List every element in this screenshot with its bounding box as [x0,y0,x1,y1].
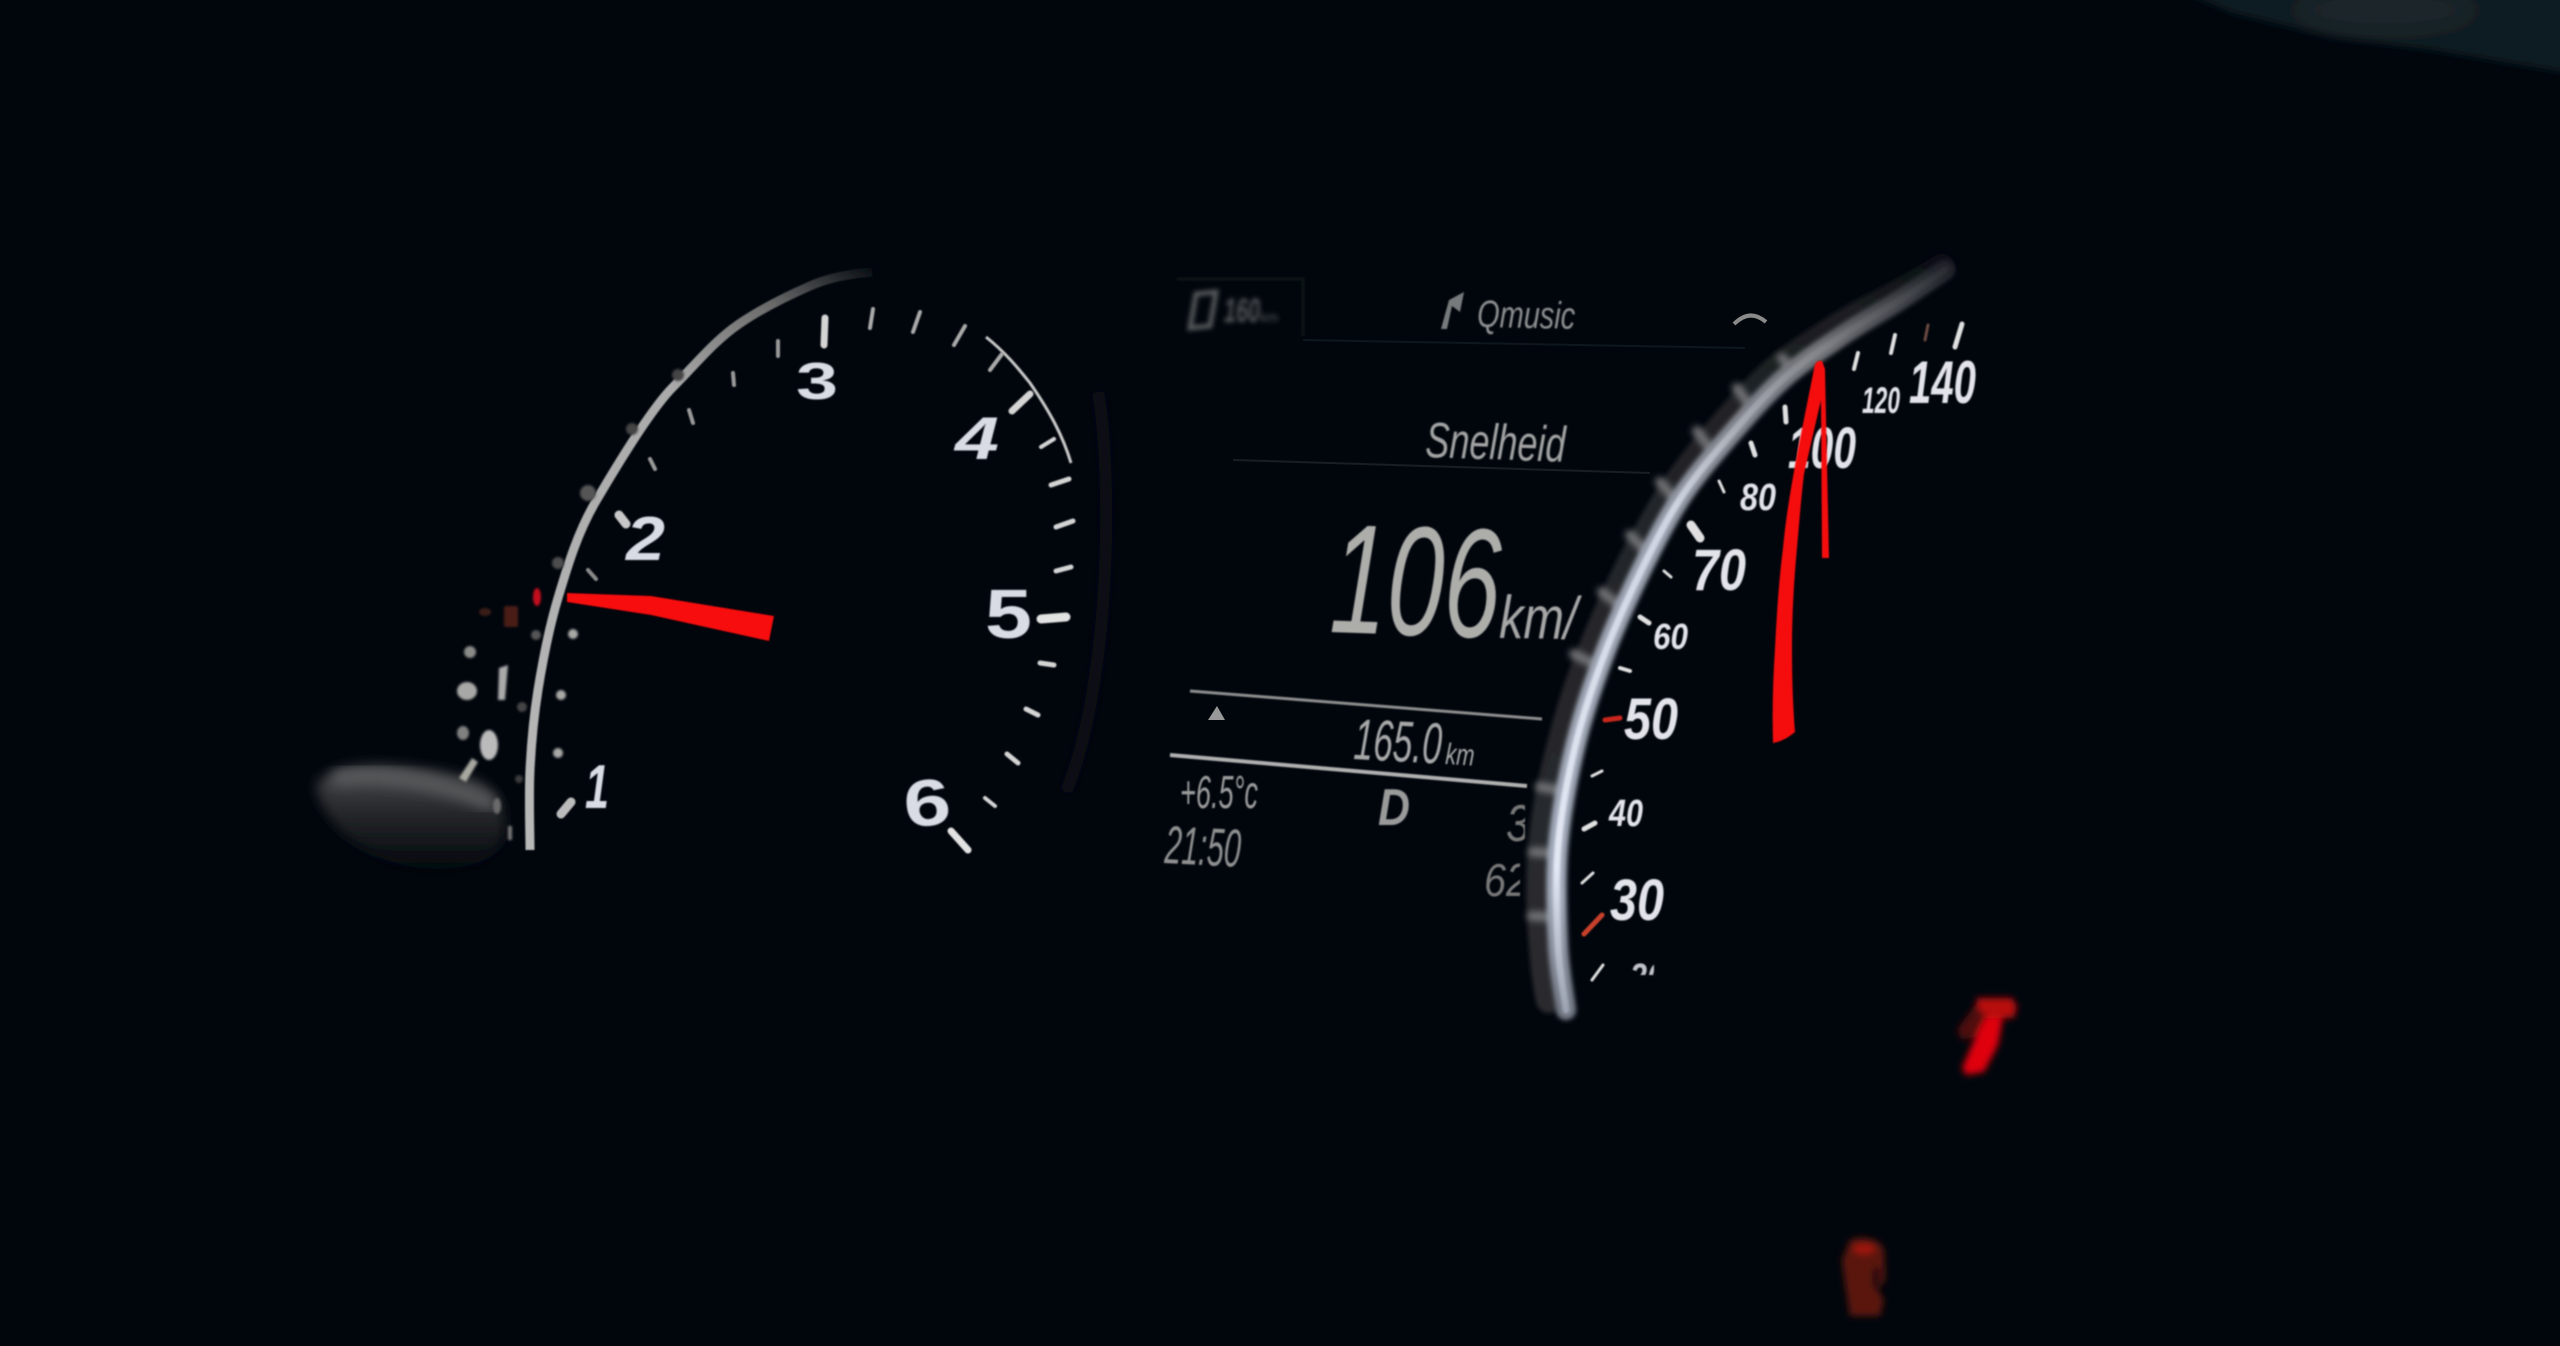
tach numerals: 1 [585,753,609,822]
speed numerals: 30 [1610,868,1664,933]
media icon [1441,292,1464,329]
range box outline [1177,279,1303,336]
range readout [1190,292,1278,330]
warning lamp: lower red [1842,1238,1885,1316]
speed numerals: 40 [1608,793,1643,835]
speed numerals: 20 [1629,957,1664,999]
speed numerals: 80 [1740,477,1776,519]
trip triangle icon [1208,706,1225,720]
display rules [1170,691,1542,786]
tach numerals: 6 [900,763,954,842]
speed numerals: 50 [1624,687,1678,752]
speed numerals: 60 [1653,616,1688,657]
mode label: Snelheid [1425,412,1568,473]
tach numerals [585,353,1032,842]
thin redline arc [986,337,1071,463]
speed numerals: 140 [1909,349,1976,416]
warning lamp: upper red [1957,998,2017,1075]
tachometer gauge [316,272,1106,869]
speedometer gauge [1532,267,1976,1010]
speed numerals [1608,349,1976,999]
clipped right readouts [1485,804,1526,898]
range readout: km [1260,309,1278,325]
tach red needle [567,593,774,641]
speed numerals: 120 [1862,380,1900,421]
clipped right readouts: 62 [1484,854,1528,906]
gear indicator: D [1378,779,1410,837]
speed value: 106 [1328,492,1504,672]
bright strip core [1556,270,1945,1010]
outside temperature: +6.5°c [1180,766,1258,818]
media station: Qmusic [1477,294,1576,338]
speedometer tick marks [1582,324,1962,980]
phone icon [1734,315,1766,324]
dim right bezel [1066,392,1106,792]
band highlights [1532,358,1792,917]
tach numerals: 5 [985,575,1032,653]
top right corner light patch [2180,0,2560,74]
tach red and amber marks [479,588,541,627]
tach tick marks [561,309,1073,850]
clock: 21:50 [1163,815,1242,879]
label rule [1233,460,1650,473]
trip distance: km [1445,738,1475,773]
tach numerals: 2 [625,505,665,574]
silver strip [1556,270,1945,1010]
central display [1163,279,1766,906]
speed unit: km/ [1499,584,1582,652]
main tach arc [529,272,872,850]
knurled outer band [1539,267,1942,1000]
trip distance: 165.0 [1352,707,1444,777]
tach low range dots [457,369,684,840]
speed red needle [1773,361,1829,743]
tach numerals: 4 [954,405,999,472]
speed numerals: 100 [1788,416,1856,481]
speedometer bezel [1532,267,1945,1010]
steering stalk blur [316,765,505,869]
range readout: 160 [1224,292,1260,330]
top display rule [1303,340,1745,348]
speed numerals: 70 [1692,538,1746,603]
tach numerals: 3 [796,353,838,411]
clipped right readouts: 3 [1506,795,1530,853]
